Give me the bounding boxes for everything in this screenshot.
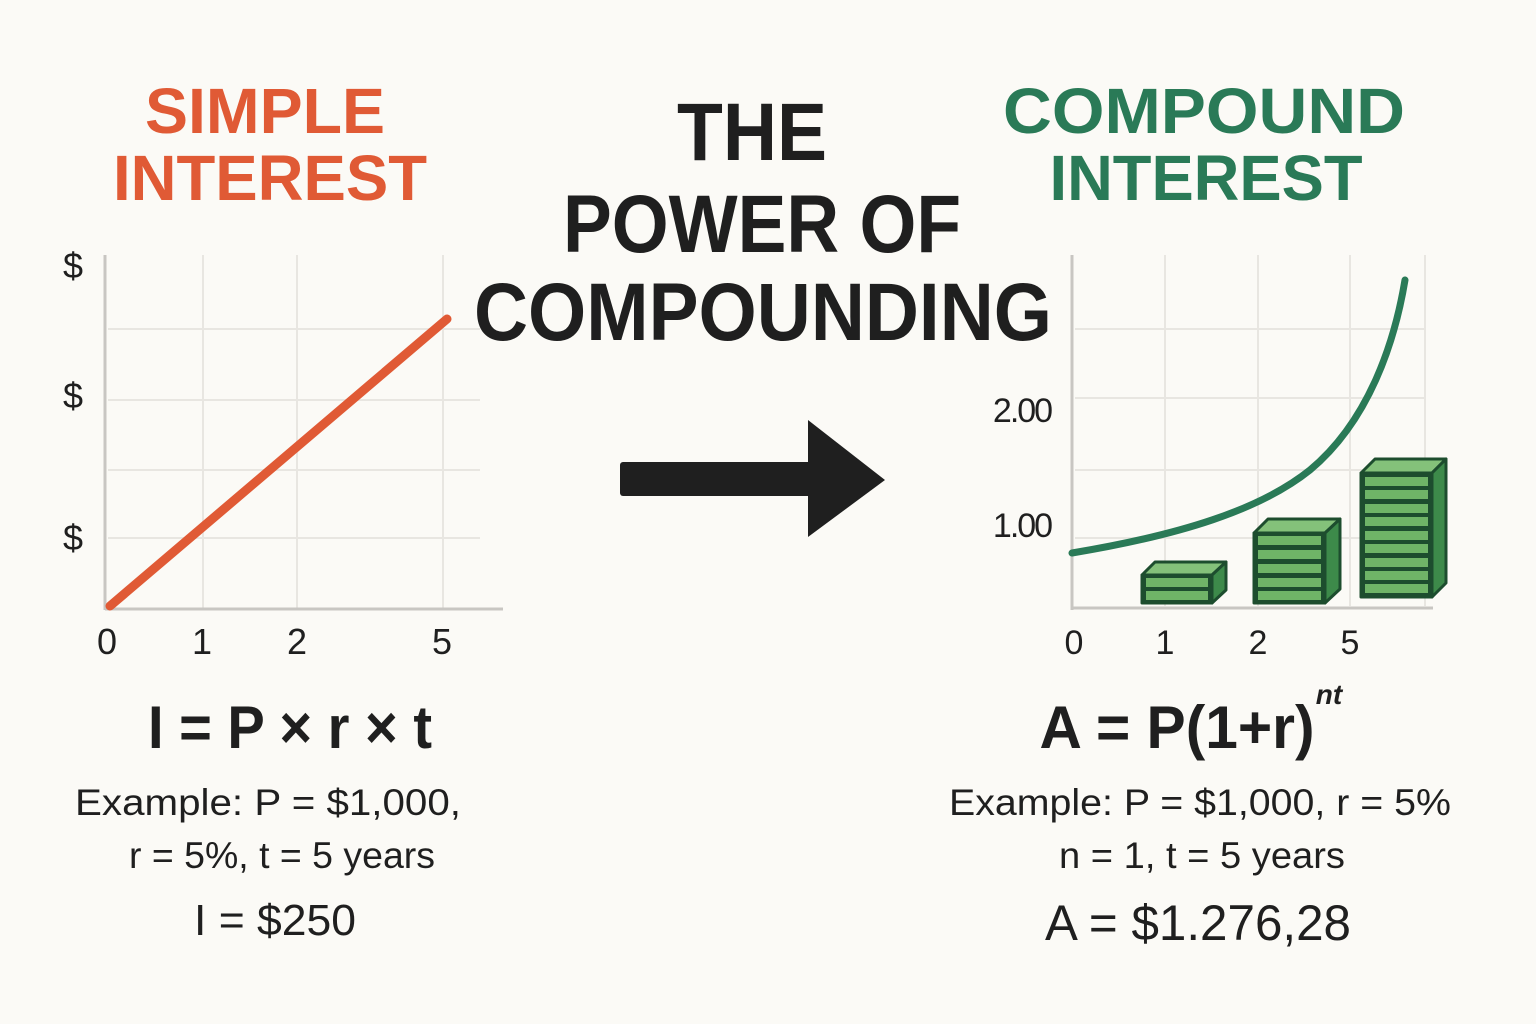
chart: compound interest curve with money stacks: 5: [1341, 624, 1359, 662]
chart: compound interest curve with money stacks: 2: [1249, 624, 1267, 662]
chart: compound interest curve with money stacks: 0: [1065, 624, 1083, 662]
chart: simple interest line: $: [63, 245, 83, 286]
formula: simple interest: I = P × r × t: [148, 694, 432, 761]
chart: compound interest curve with money stacks: 1: [1156, 624, 1174, 662]
chart: compound interest curve with money stacks: 1.00: [993, 507, 1052, 545]
chart: simple interest line: $: [63, 375, 83, 416]
heading: compound interest: INTEREST: [1050, 142, 1362, 214]
chart: simple interest line: 5: [432, 621, 452, 662]
text: compound example: n = 1, t = 5 years: [1059, 835, 1345, 876]
chart: compound interest curve with money stacks: [993, 255, 1446, 662]
title: [474, 87, 1052, 358]
formula: compound interest: A = P(1+r): [1040, 694, 1314, 761]
icon: money stack small: [1142, 562, 1226, 603]
title: THE: [677, 87, 827, 178]
chart: simple interest line: 2: [287, 621, 307, 662]
text: simple example: r = 5%, t = 5 years: [129, 835, 435, 876]
heading: compound interest: COMPOUND: [1003, 75, 1405, 147]
chart: simple interest line: 1: [192, 621, 212, 662]
chart: compound interest curve with money stacks: 2.00: [993, 392, 1052, 430]
chart: simple interest line: $: [63, 517, 83, 558]
icon: money stack medium: [1254, 519, 1340, 603]
arrow: [620, 420, 885, 537]
title: COMPOUNDING: [474, 267, 1052, 358]
text: simple example: I = $250: [194, 896, 356, 945]
chart: simple interest line: 0: [97, 621, 117, 662]
text: compound example: Example: P = $1,000, r = 5%: [949, 782, 1451, 823]
text: compound example: [949, 782, 1451, 951]
formula: compound interest: [949, 679, 1451, 951]
text: simple example: [75, 782, 461, 945]
heading: simple interest: INTEREST: [113, 142, 427, 214]
text: simple example: Example: P = $1,000,: [75, 782, 461, 823]
chart: simple interest line: [63, 245, 503, 662]
heading: simple interest: SIMPLE: [145, 75, 385, 147]
heading: compound interest: [1003, 75, 1405, 214]
icon: money stack large: [1361, 459, 1446, 597]
formula: compound interest: nt: [1316, 679, 1344, 710]
text: compound example: A = $1.276,28: [1045, 895, 1351, 951]
heading: simple interest: [113, 75, 427, 214]
title: POWER OF: [563, 179, 961, 270]
formula: simple interest: [75, 694, 461, 945]
